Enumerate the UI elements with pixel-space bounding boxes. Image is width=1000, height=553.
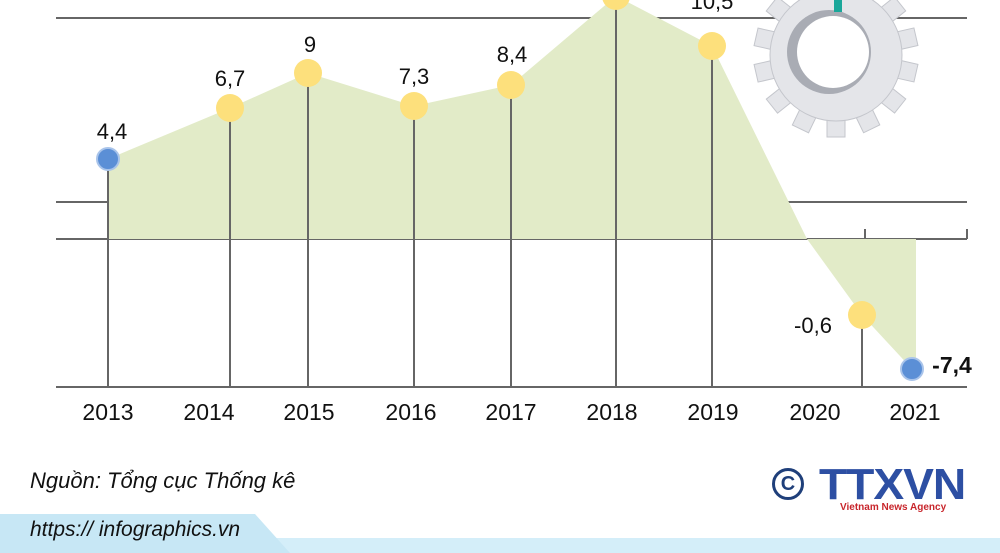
value labels: 6,7	[215, 66, 245, 91]
area fill	[108, 0, 916, 369]
source text: Nguồn: Tổng cục Thống kê	[30, 468, 295, 493]
value labels: 7,3	[399, 64, 429, 89]
value labels: -0,6	[794, 313, 832, 338]
year labels: 2021	[889, 399, 941, 425]
icon: gear	[754, 0, 918, 137]
value labels: -7,4	[932, 352, 972, 378]
year labels: 2015	[283, 399, 335, 425]
url text: https:// infographics.vn	[30, 518, 240, 541]
value labels	[97, 0, 972, 378]
footer band	[0, 538, 1000, 553]
value labels: 9	[304, 32, 316, 57]
logo: TTXVN: TTXVN	[819, 460, 965, 509]
data points	[97, 0, 923, 380]
year labels	[82, 399, 941, 425]
year labels: 2016	[385, 399, 437, 425]
url tab	[0, 514, 290, 553]
logo: TTXVN: C	[781, 473, 795, 495]
year labels: 2013	[82, 399, 134, 425]
year labels: 2017	[485, 399, 537, 425]
logo: TTXVN	[772, 460, 965, 513]
value labels: 8,4	[497, 42, 527, 67]
year labels: 2019	[687, 399, 739, 425]
year labels: 2018	[586, 399, 638, 425]
logo: TTXVN: Vietnam News Agency	[840, 502, 946, 513]
year labels: 2020	[789, 399, 841, 425]
value labels: 4,4	[97, 119, 127, 144]
year labels: 2014	[183, 399, 235, 425]
